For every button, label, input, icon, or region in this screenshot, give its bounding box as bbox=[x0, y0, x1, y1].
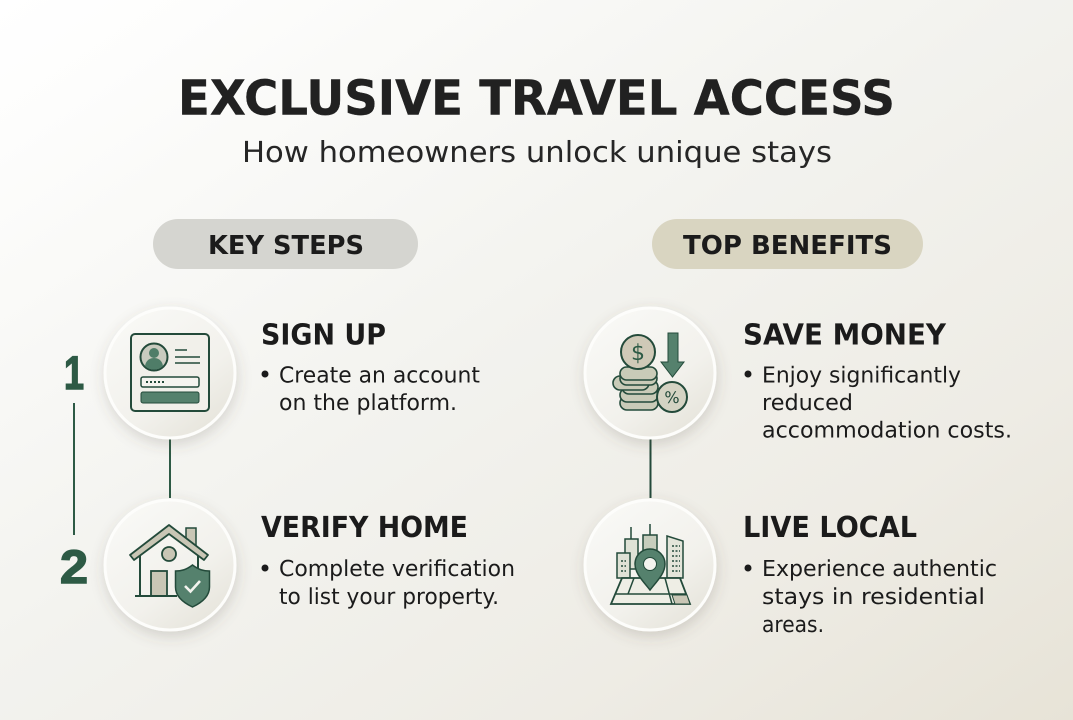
icon: coins with discount: % bbox=[664, 388, 680, 407]
benefit text: live local: stays in residential bbox=[762, 585, 985, 610]
heading pill: key steps bbox=[153, 219, 418, 269]
benefit text: live local bbox=[743, 510, 997, 638]
benefit text: live local: areas. bbox=[762, 613, 824, 638]
icon: coins with discount bbox=[585, 308, 715, 438]
step text: sign up bbox=[261, 318, 480, 416]
icon: city with location pin bbox=[585, 500, 715, 630]
step text: verify home: VERIFY HOME bbox=[261, 510, 468, 544]
subtitle: How homeowners unlock unique stays bbox=[242, 135, 832, 169]
benefit text: save money: Enjoy significantly bbox=[762, 364, 961, 388]
step progress line bbox=[73, 403, 75, 535]
title: EXCLUSIVE TRAVEL ACCESS bbox=[178, 70, 895, 126]
heading pill: top benefits bbox=[652, 219, 923, 269]
icon: house with shield bbox=[105, 500, 235, 630]
step number 1: 1 bbox=[64, 346, 84, 399]
benefit text: save money: accommodation costs. bbox=[762, 418, 1012, 444]
icon: account sign-up form bbox=[105, 308, 235, 438]
benefit text: save money: SAVE MONEY bbox=[743, 318, 947, 352]
step number 2: 2 bbox=[60, 540, 88, 593]
icon: coins with discount: $ bbox=[631, 341, 645, 366]
benefit text: live local: Experience authentic bbox=[762, 557, 997, 582]
step text: sign up: SIGN UP bbox=[261, 318, 386, 352]
benefit text: live local: LIVE LOCAL bbox=[743, 510, 917, 544]
heading pill: key steps: KEY STEPS bbox=[208, 231, 364, 261]
connector: steps bbox=[169, 438, 171, 498]
step text: verify home: Complete verification bbox=[279, 557, 515, 582]
step text: sign up: Create an account bbox=[279, 364, 480, 388]
benefit text: save money bbox=[743, 318, 1012, 444]
benefit text: save money: reduced bbox=[762, 391, 853, 416]
step text: sign up: on the platform. bbox=[279, 391, 457, 416]
connector: benefits bbox=[650, 438, 652, 498]
heading pill: top benefits: TOP BENEFITS bbox=[683, 231, 892, 261]
step text: verify home: to list your property. bbox=[279, 585, 499, 610]
step text: verify home bbox=[261, 510, 515, 610]
